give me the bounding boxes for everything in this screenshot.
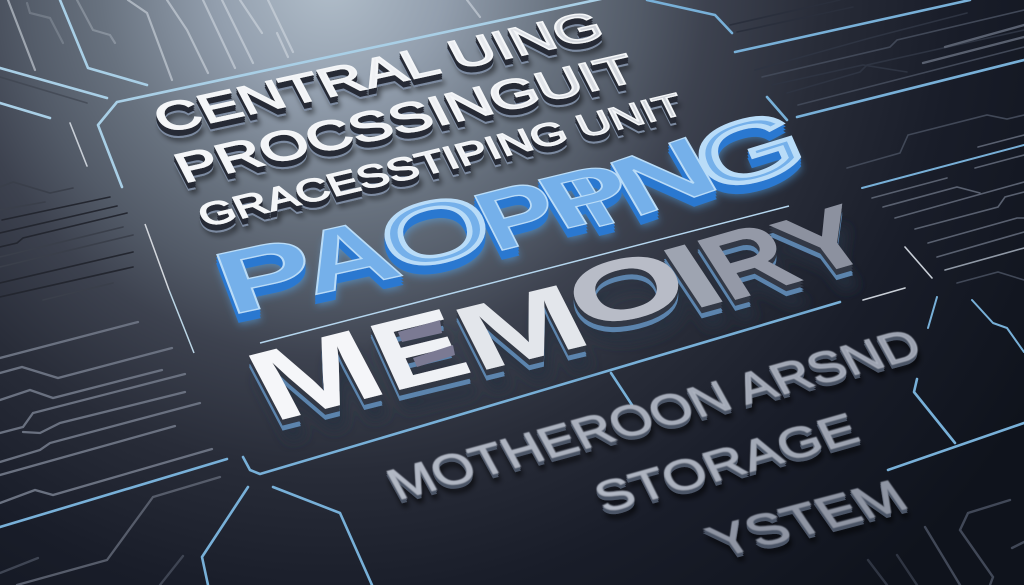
heading: graphics: GRACESSTIPING UNIT <box>192 87 690 234</box>
memory E inner shading <box>398 320 455 367</box>
circuit lines: pale short traces <box>70 123 932 300</box>
heading: blue glass word: P <box>459 162 577 269</box>
heading: central: CENTRAL UING <box>145 3 612 142</box>
heading: memory: I <box>643 225 744 328</box>
circuit lines: dark thin traces left <box>0 77 133 300</box>
heading: blue glass word: O <box>366 173 504 291</box>
heading: memory: O <box>556 235 697 344</box>
heading: processing: PROCSSINGUIT <box>166 46 645 192</box>
heading: blue glass word: N <box>593 118 733 234</box>
heading: blue glass word: P <box>521 146 653 245</box>
heading: memory: M <box>229 308 403 442</box>
circuit lines: gray traces right <box>730 0 1024 585</box>
heading: memory: R <box>678 202 818 320</box>
heading: blue glass word <box>201 91 819 333</box>
heading: memory: Y <box>755 188 896 295</box>
heading: memory: M <box>438 265 606 391</box>
heading: blue glass word: P <box>201 218 330 333</box>
heading: memory <box>229 188 896 442</box>
label: motherboard: MOTHEROON ARSND <box>378 320 930 509</box>
label: system: YSTEM <box>697 472 918 566</box>
heading: blue glass word: G <box>679 91 819 211</box>
circuit lines: pale traces top <box>8 0 480 80</box>
circuit lines: gray traces lower left <box>0 322 220 585</box>
label: storage: STORAGE <box>586 404 867 522</box>
heading: blue glass word: I <box>554 158 630 243</box>
heading: memory: E <box>353 287 485 412</box>
heading: blue glass word: A <box>280 200 413 313</box>
thin divider lines <box>145 206 789 353</box>
